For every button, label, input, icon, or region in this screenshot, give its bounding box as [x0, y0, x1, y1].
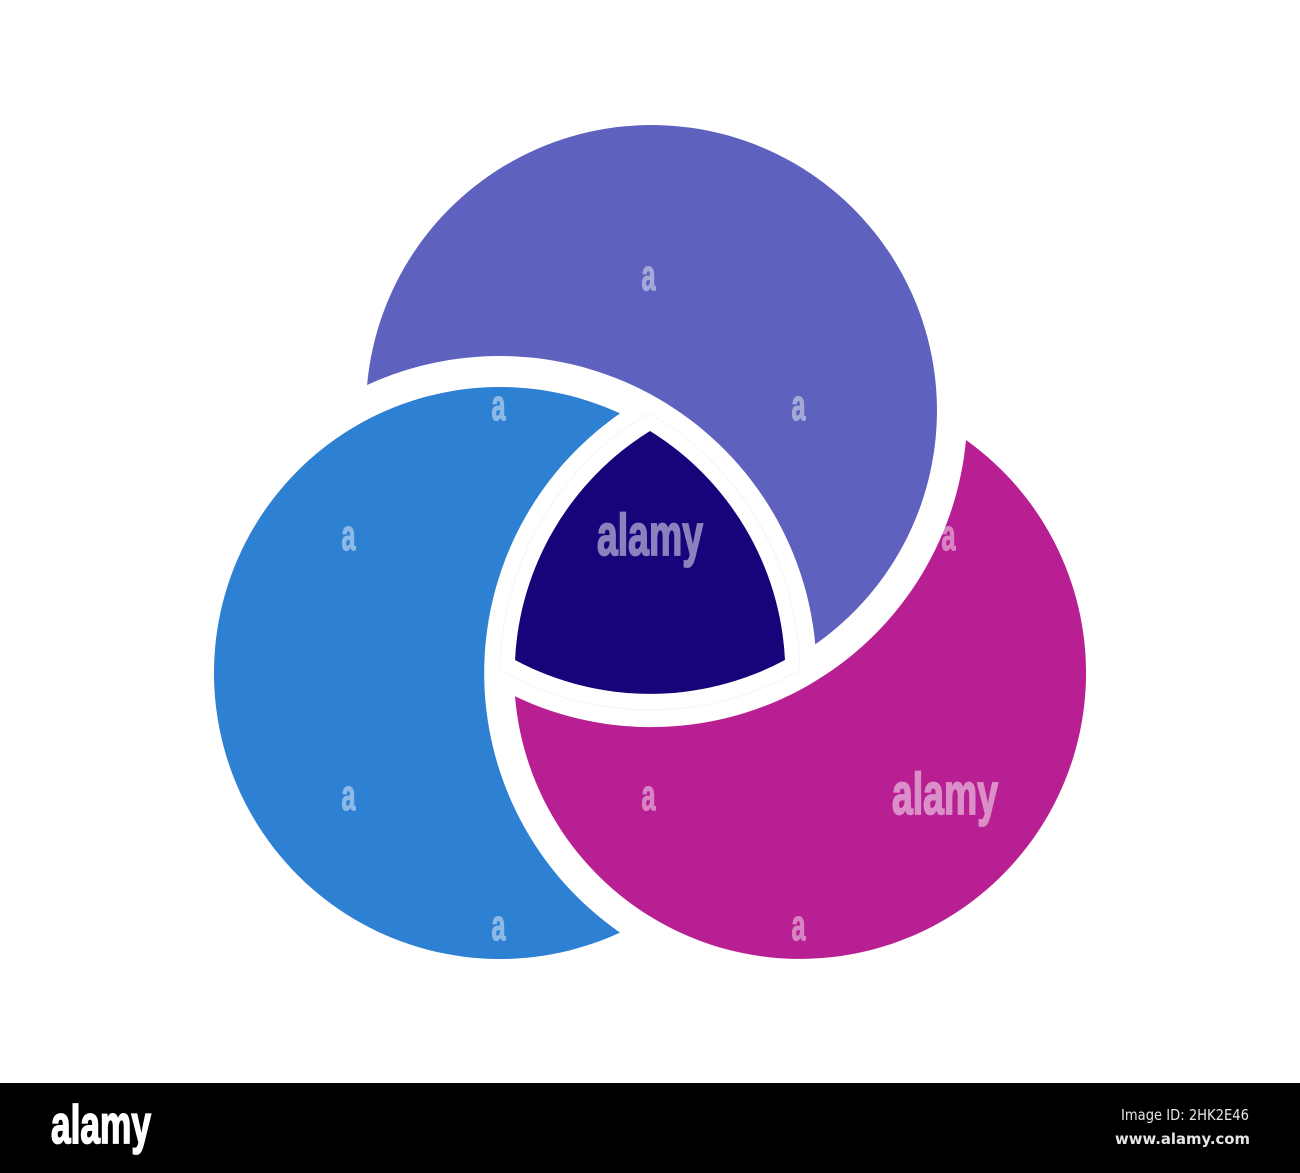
watermark: small repeated marks: a: [342, 771, 356, 820]
watermark: small repeated marks: a: [642, 771, 656, 820]
purple top circle segment: [367, 125, 937, 644]
website: www.alamy.com: [1115, 1130, 1250, 1148]
footer logo: alamy: [51, 1095, 151, 1155]
image id: Image ID: 2HK2E46: [1121, 1106, 1249, 1124]
watermark: small repeated marks: a: [492, 901, 506, 950]
watermark: small repeated marks: a: [792, 381, 806, 430]
watermark: small repeated marks: a: [342, 511, 356, 560]
watermark: magenta wordmark: alamy: [892, 762, 998, 827]
faint outline around centre: [500, 413, 800, 710]
watermark: centre wordmark: alamy: [597, 503, 703, 568]
watermark: small repeated marks: a: [792, 901, 806, 950]
watermark: small repeated marks: a: [642, 251, 656, 300]
watermark: small repeated marks: [342, 251, 956, 950]
watermark: small repeated marks: a: [492, 381, 506, 430]
footer bar: [0, 1083, 1300, 1173]
dark centre overlap: [515, 431, 785, 694]
magenta right circle segment: [515, 440, 1086, 959]
blue left circle segment: [214, 387, 620, 959]
watermark: small repeated marks: a: [942, 511, 956, 560]
